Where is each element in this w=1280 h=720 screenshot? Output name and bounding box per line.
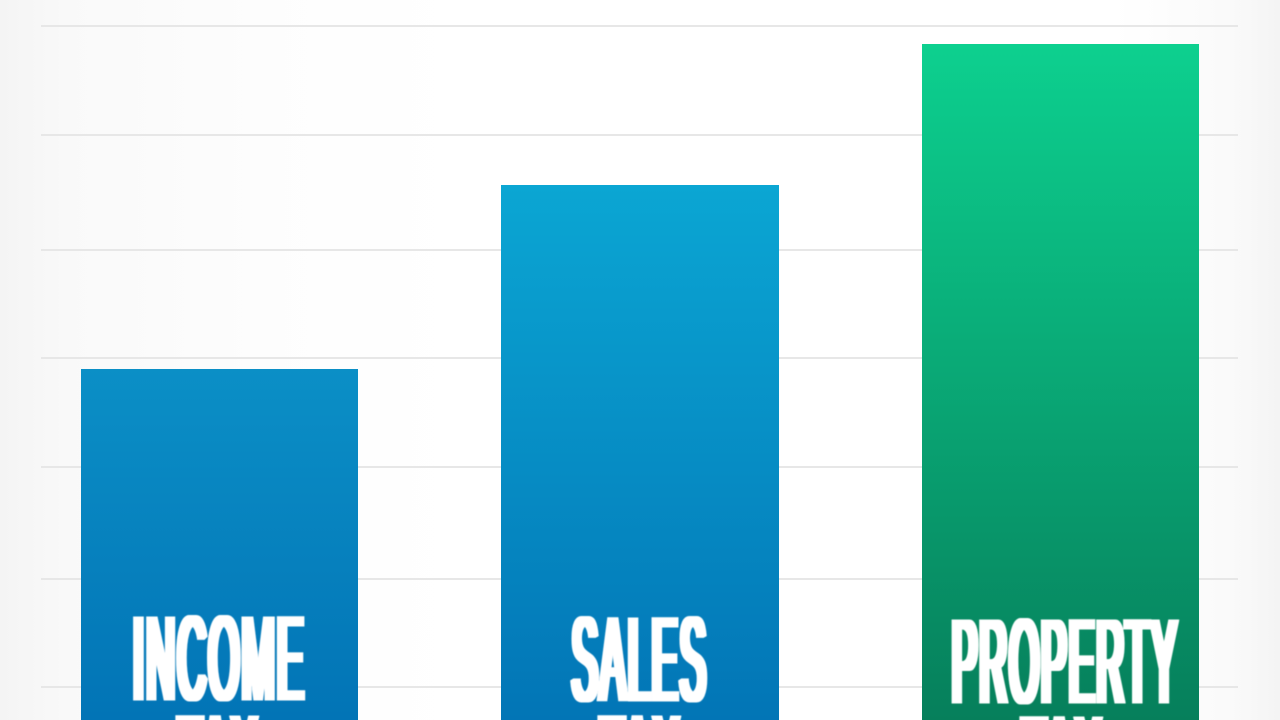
label: property tax [952,593,1179,720]
bar: property tax [922,44,1199,720]
bar: sales tax [501,185,779,720]
bar: income tax [81,369,358,720]
label: income tax [133,590,306,720]
label: sales tax [572,591,708,720]
